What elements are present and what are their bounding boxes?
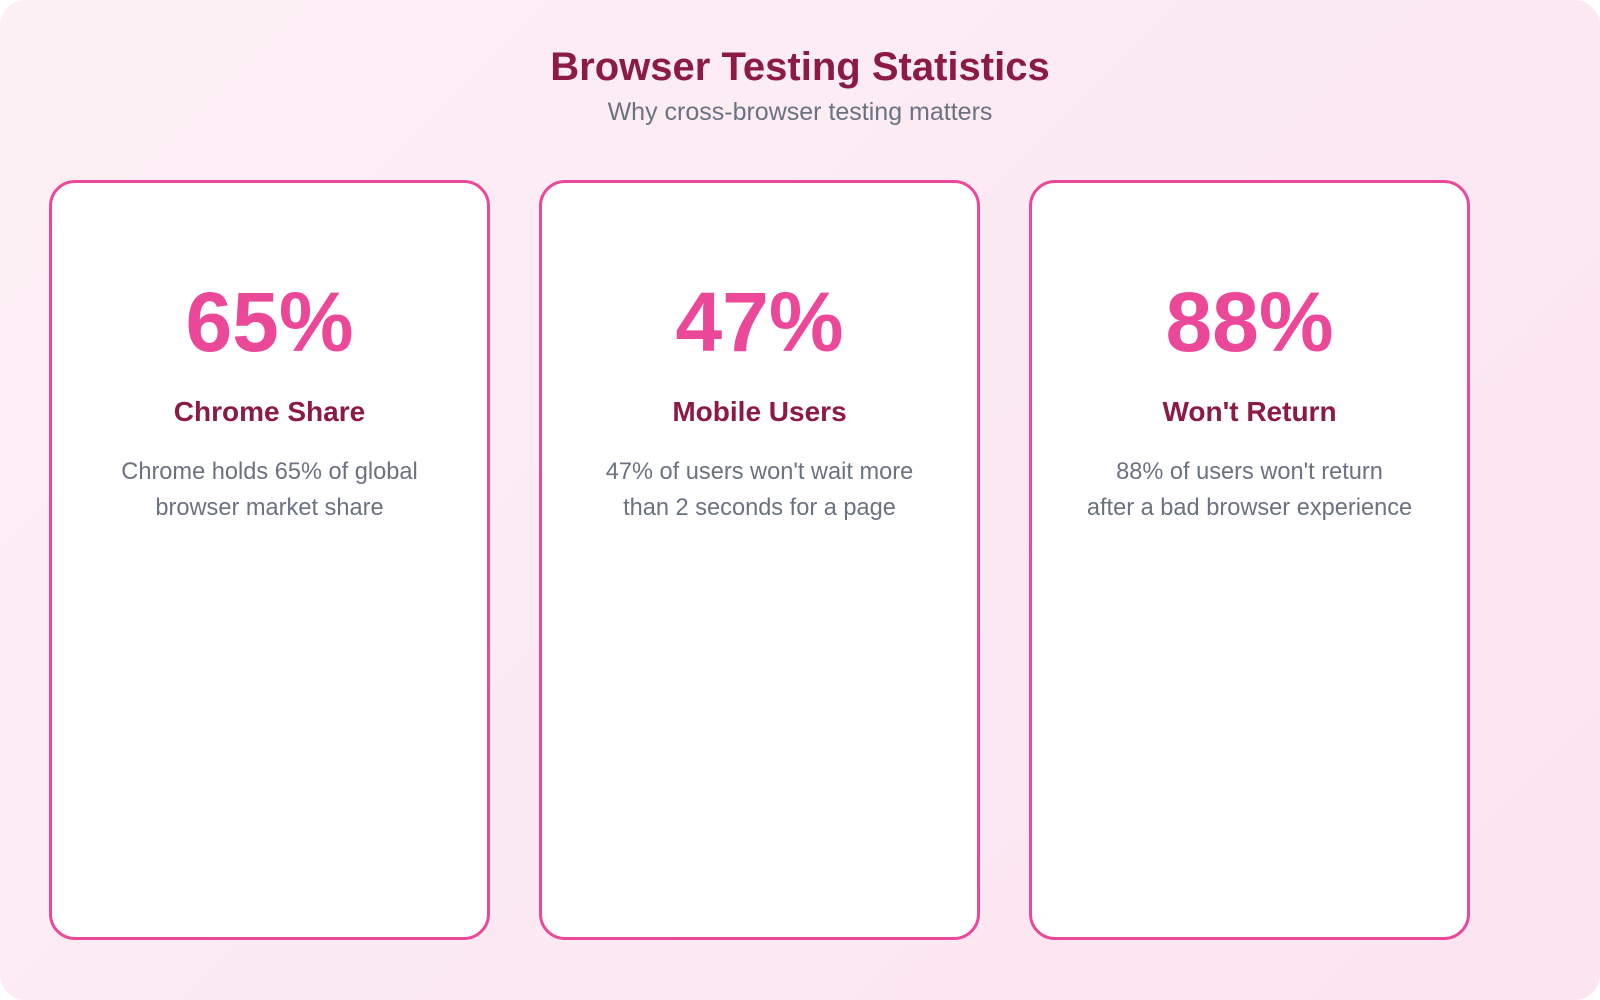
description: 88% of users won't return xyxy=(1116,459,1383,485)
panel: chrome share xyxy=(49,180,490,940)
label: chrome share: Chrome Share xyxy=(174,396,365,427)
panel: mobile users xyxy=(539,180,980,940)
stat: 88%: 88% xyxy=(1165,275,1334,369)
description xyxy=(1087,459,1412,521)
stat: 65%: 65% xyxy=(185,275,354,369)
description: after a bad browser experience xyxy=(1087,495,1412,521)
description: Chrome holds 65% of global xyxy=(121,459,418,485)
panel: won't return xyxy=(1029,180,1470,940)
description xyxy=(121,459,418,521)
description: than 2 seconds for a page xyxy=(623,495,896,521)
label: mobile users: Mobile Users xyxy=(672,396,847,427)
stat: 47%: 47% xyxy=(675,275,844,369)
description xyxy=(606,459,913,521)
label: won't return: Won't Return xyxy=(1162,396,1337,427)
description: browser market share xyxy=(155,495,384,521)
title: Browser Testing Statistics xyxy=(550,45,1050,89)
description: 47% of users won't wait more xyxy=(606,459,913,485)
subtitle: Why cross-browser testing matters xyxy=(608,98,992,126)
